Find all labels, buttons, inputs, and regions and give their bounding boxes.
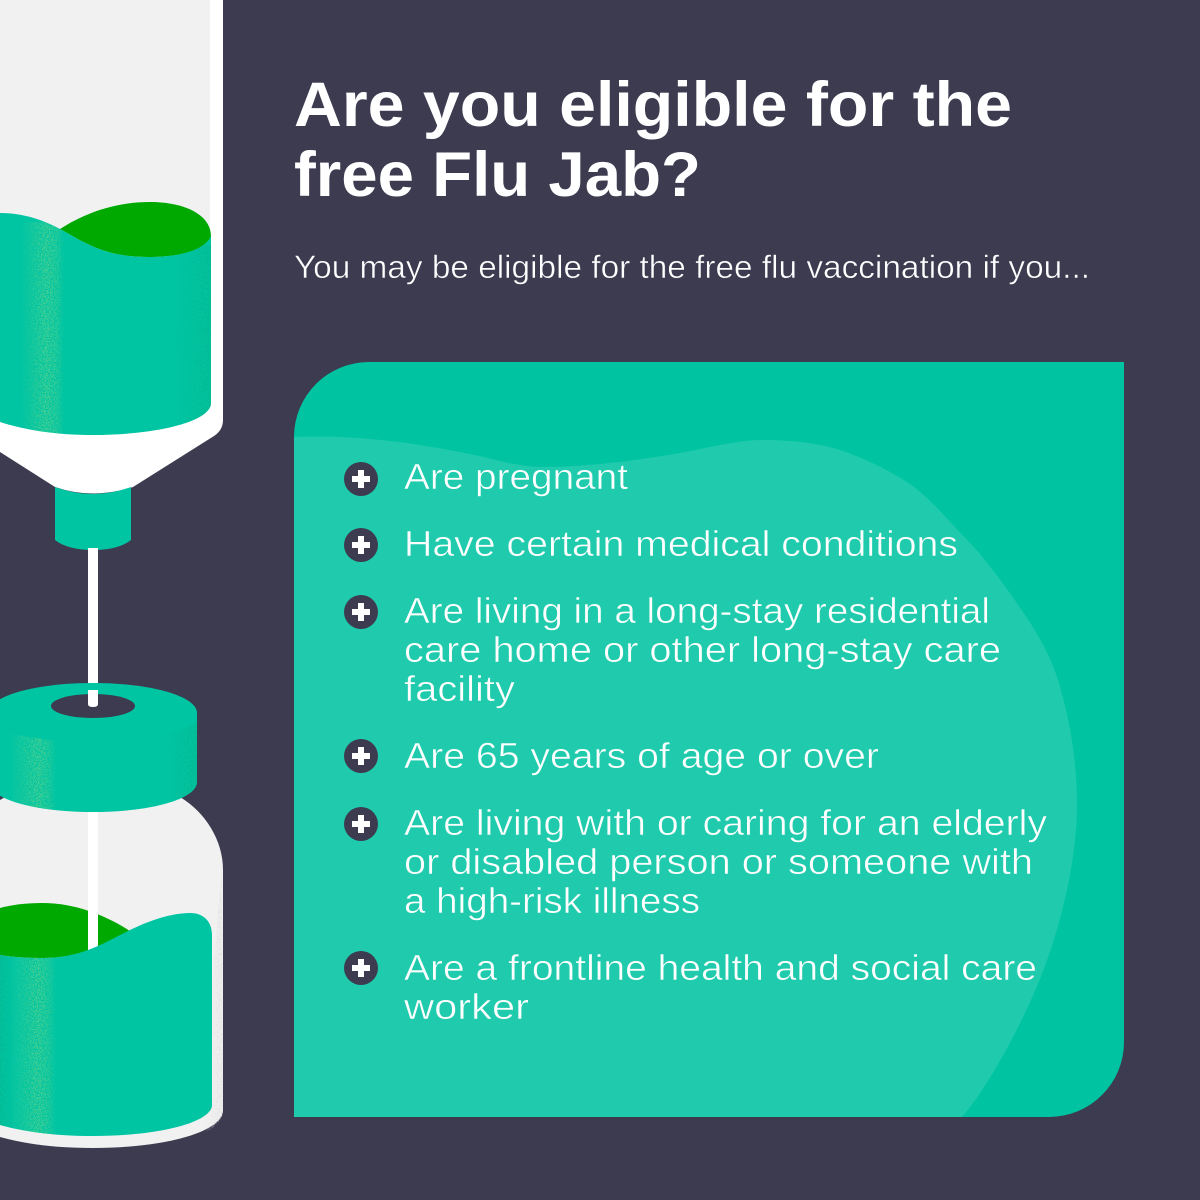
list text: Are a frontline health and social care bbox=[404, 947, 1037, 988]
liquid body bbox=[0, 213, 212, 436]
title: free Flu Jab? bbox=[294, 140, 701, 210]
list text: or disabled person or someone with bbox=[404, 841, 1033, 882]
list text: Are living with or caring for an elderly bbox=[404, 802, 1047, 843]
needle inside vial bbox=[88, 805, 98, 951]
needle bbox=[88, 548, 98, 707]
liquid body bbox=[0, 913, 212, 1140]
bullet icons bbox=[344, 462, 378, 985]
list text: worker bbox=[403, 986, 529, 1027]
vial cap bbox=[0, 683, 197, 815]
title: Are you eligible for the bbox=[294, 70, 1012, 140]
syringe nozzle bbox=[55, 487, 131, 550]
list text: facility bbox=[404, 668, 515, 709]
list text: a high-risk illness bbox=[404, 880, 700, 921]
illustration: syringe bbox=[0, 0, 223, 550]
vial glass bbox=[0, 797, 223, 1148]
list text: Are living in a long-stay residential bbox=[404, 590, 990, 631]
vial glass shading bbox=[190, 870, 223, 1140]
panel: eligibility list bbox=[294, 362, 1124, 1117]
liquid surface bbox=[60, 202, 211, 257]
list text: Are pregnant bbox=[404, 456, 628, 497]
illustration: vial bbox=[0, 683, 223, 1148]
list text bbox=[403, 456, 1047, 1027]
subtitle: You may be eligible for the free flu vaccination if you... bbox=[294, 249, 1090, 285]
list text: care home or other long-stay care bbox=[404, 629, 1001, 670]
liquid surface bbox=[0, 903, 130, 958]
syringe glass interior bbox=[0, 0, 210, 300]
syringe barrel bbox=[0, 0, 223, 494]
list text: Have certain medical conditions bbox=[404, 523, 958, 564]
panel background bbox=[294, 362, 1124, 1117]
list text: Are 65 years of age or over bbox=[404, 735, 879, 776]
panel lighter wave bbox=[294, 437, 1077, 1117]
